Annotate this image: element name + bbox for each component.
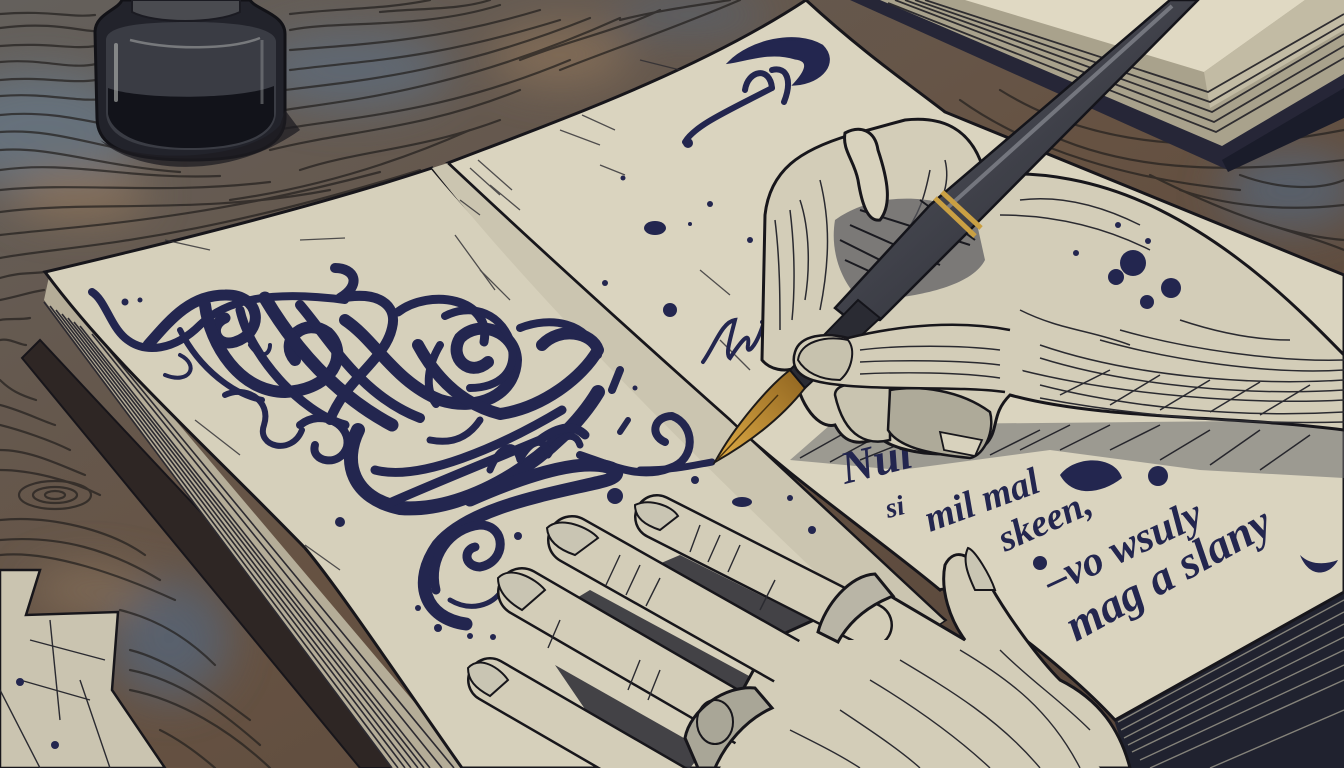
handwritten script on right page: mil mal xyxy=(919,460,1046,540)
hand: shadowed palm under pen xyxy=(834,199,985,300)
hand: ink spots xyxy=(1073,222,1181,309)
hatching xyxy=(548,525,1090,768)
spine gutter xyxy=(432,163,945,650)
ink flourish, upper page xyxy=(683,39,828,148)
hatched shadow below writing hand xyxy=(790,420,1344,478)
handwritten script on right page: –vo wsuly xyxy=(1036,491,1210,604)
middle finger xyxy=(572,540,820,680)
ink bottle xyxy=(95,0,285,160)
pen barrel xyxy=(835,0,1198,320)
icon: ring on writing hand xyxy=(845,129,887,220)
journal cover xyxy=(22,340,440,768)
handwritten script on right page: si xyxy=(881,490,908,525)
ink flourish, left page xyxy=(92,268,816,640)
palm fill joining fingers xyxy=(720,640,1100,768)
writing hand with pen xyxy=(715,0,1344,462)
torn paper scrap, lower left xyxy=(0,570,165,768)
hand: lower fingers xyxy=(835,383,890,442)
pen grip xyxy=(790,300,880,388)
ink spatter, right page xyxy=(602,176,753,390)
hand: back and wrist xyxy=(762,119,1344,454)
handwritten script on right page: mag a slany xyxy=(1056,496,1280,651)
thumbnail xyxy=(798,338,852,380)
pen nib xyxy=(715,370,805,462)
ring on index finger xyxy=(818,574,893,642)
closed book, top right xyxy=(850,0,1344,172)
handwritten script on right page xyxy=(790,420,1344,651)
thumb over grip xyxy=(794,325,1030,395)
shadows between fingers xyxy=(555,555,850,768)
small script mark on right page xyxy=(703,320,780,362)
fingernails xyxy=(468,502,995,696)
page stack, right edge xyxy=(1112,590,1344,768)
spine fold line xyxy=(448,163,945,620)
hand: hatching xyxy=(775,160,1344,423)
shadow: ink bottle xyxy=(100,110,300,167)
left page xyxy=(45,168,1000,768)
ring on ring finger xyxy=(685,688,772,768)
right page xyxy=(448,0,1344,720)
index finger xyxy=(657,517,870,625)
ring finger xyxy=(522,592,760,730)
pen gold collar xyxy=(935,192,981,236)
handwritten script on right page: Nui xyxy=(834,427,917,494)
page stack, left edge xyxy=(44,272,470,768)
little finger xyxy=(490,680,680,768)
handwritten script on right page: skeen, xyxy=(991,482,1098,561)
resting hand, lower xyxy=(468,502,1130,768)
back of hand xyxy=(700,555,1130,768)
